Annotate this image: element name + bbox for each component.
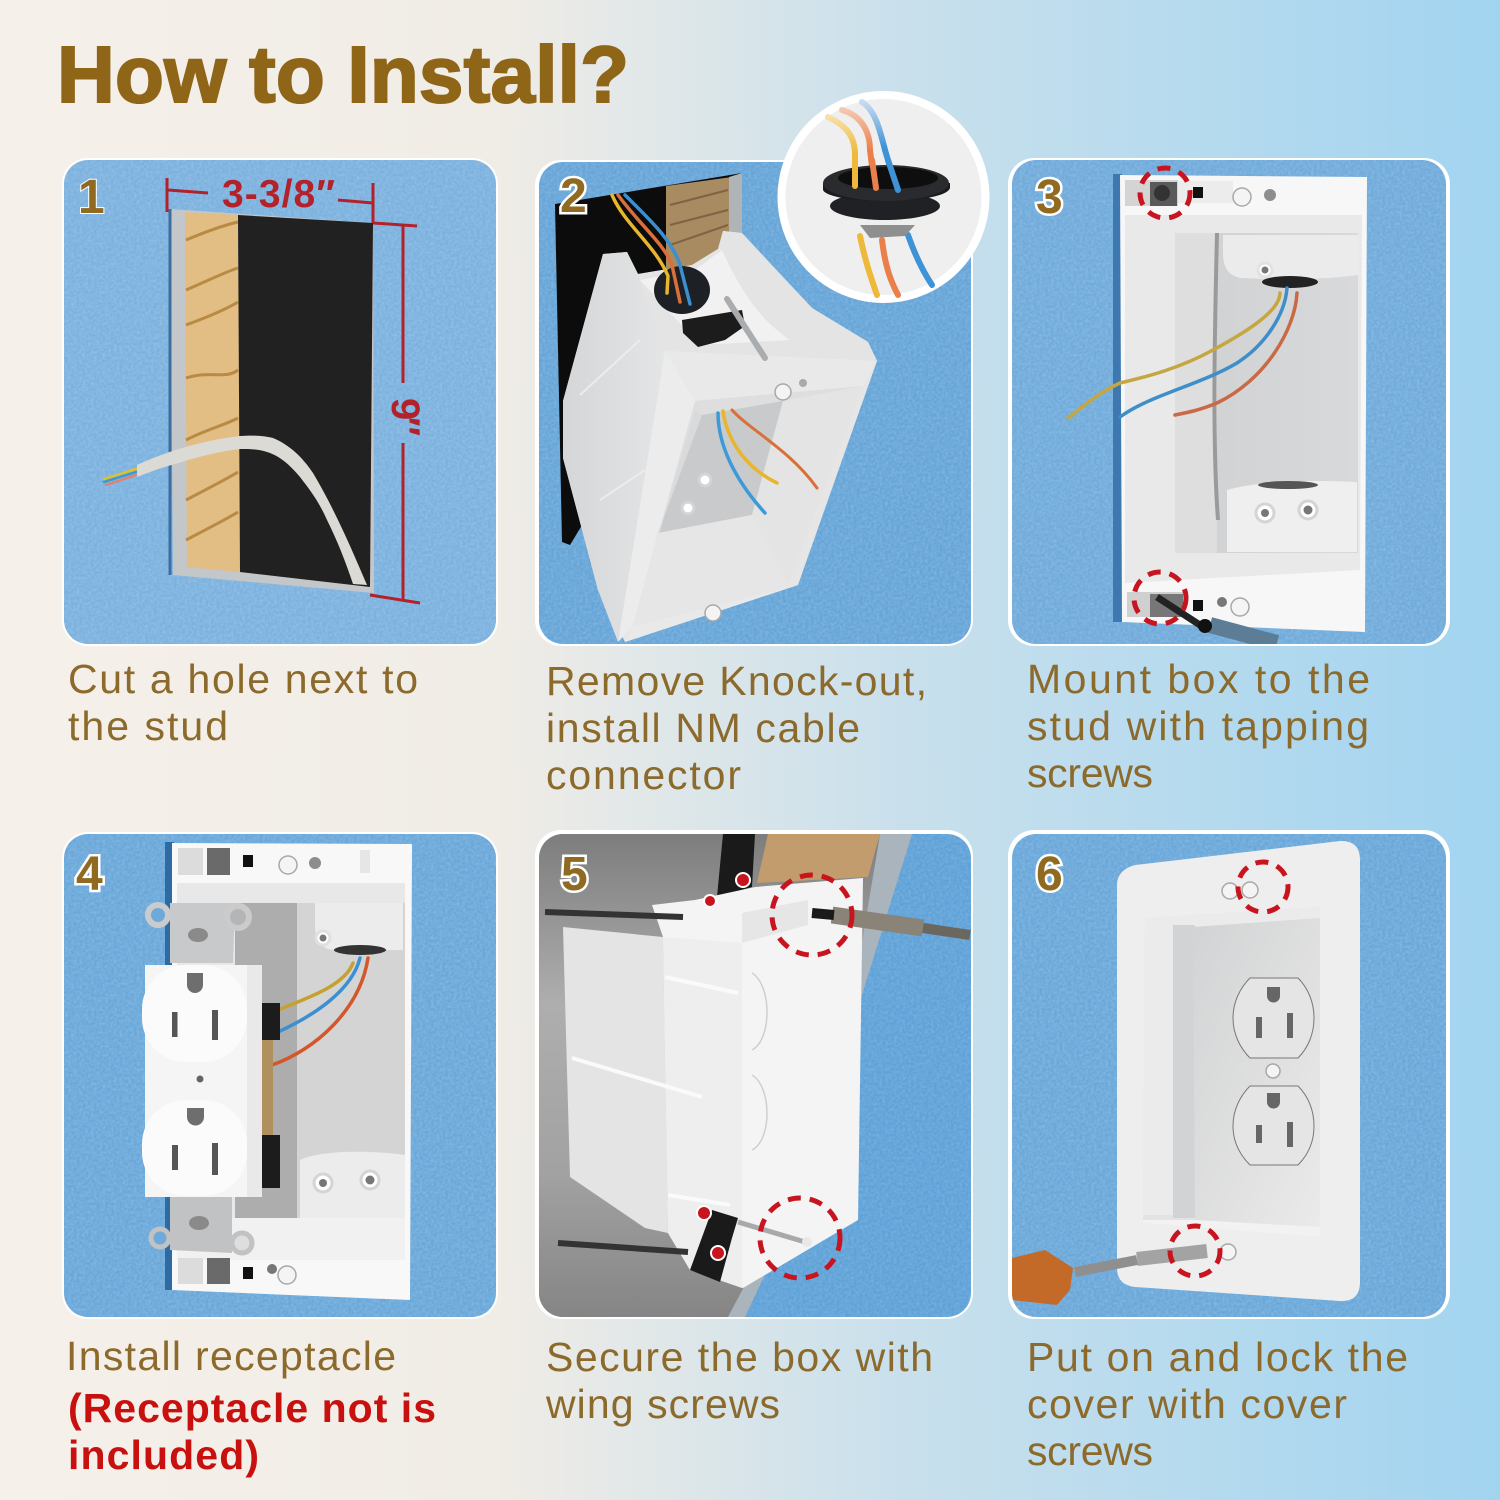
caption 6: screws bbox=[1027, 1428, 1153, 1474]
step number 6: 6 bbox=[1036, 848, 1063, 901]
caption 4: Install receptacle bbox=[66, 1333, 396, 1379]
panel: step 2 knock-out bbox=[535, 91, 990, 646]
screwdriver bbox=[812, 913, 970, 935]
wires top bbox=[612, 195, 690, 304]
panel: step 1 cut hole bbox=[62, 158, 498, 646]
caption 4: included) bbox=[68, 1432, 259, 1478]
panel: step 5 wing screws bbox=[535, 830, 973, 1319]
caption 2: install NM cable bbox=[546, 705, 860, 751]
step number 1: 1 bbox=[78, 171, 105, 224]
caption 4: (Receptacle not is bbox=[68, 1385, 436, 1431]
outlet faces bbox=[1233, 978, 1314, 1165]
panel: step 4 receptacle bbox=[62, 832, 498, 1319]
caption 6 bbox=[1027, 1334, 1408, 1474]
box bbox=[165, 842, 412, 1300]
caption 3 bbox=[1027, 656, 1370, 796]
caption 5: Secure the box with bbox=[546, 1334, 933, 1380]
caption 6: cover with cover bbox=[1027, 1381, 1347, 1427]
caption 1: Cut a hole next to bbox=[68, 656, 418, 702]
wires bbox=[272, 958, 368, 1065]
box bbox=[563, 878, 863, 1288]
callouts bbox=[1134, 168, 1190, 624]
caption 3: Mount box to the bbox=[1027, 656, 1370, 702]
screwdriver bbox=[1157, 597, 1277, 643]
caption 3: screws bbox=[1027, 750, 1153, 796]
dimension: width: 3-3/8″ bbox=[222, 173, 335, 216]
caption 5 bbox=[545, 1334, 933, 1427]
caption 1: the stud bbox=[68, 703, 228, 749]
callouts bbox=[760, 875, 852, 1278]
panel: step 3 mount box bbox=[1008, 158, 1450, 646]
wires bbox=[1068, 288, 1297, 418]
wires inside bbox=[718, 410, 817, 513]
panel: step 6 cover bbox=[1008, 830, 1450, 1319]
caption 4 bbox=[66, 1333, 436, 1478]
step number 3: 3 bbox=[1036, 171, 1063, 224]
caption 3: stud with tapping bbox=[1027, 703, 1369, 749]
hole with stud bbox=[170, 209, 374, 593]
dimension: height: 9″ bbox=[383, 398, 427, 436]
box bbox=[1113, 174, 1367, 632]
step number 2: 2 bbox=[560, 170, 587, 223]
red markers bbox=[697, 873, 750, 1260]
title: How to Install? bbox=[57, 30, 629, 119]
step number 5: 5 bbox=[561, 848, 588, 901]
caption 2: connector bbox=[546, 752, 741, 798]
step number 4: 4 bbox=[76, 848, 103, 901]
cover plate bbox=[1117, 841, 1360, 1301]
inset: connector bbox=[778, 91, 990, 303]
cable bbox=[104, 436, 367, 585]
receptacle bbox=[142, 903, 280, 1253]
dimension: width bbox=[167, 173, 373, 223]
caption 5: wing screws bbox=[545, 1381, 780, 1427]
dimension: height bbox=[370, 223, 427, 603]
caption 2: Remove Knock-out, bbox=[546, 658, 927, 704]
box body bbox=[563, 231, 877, 642]
screws bbox=[545, 912, 812, 1252]
caption 6: Put on and lock the bbox=[1027, 1334, 1408, 1380]
callouts bbox=[1170, 862, 1288, 1276]
caption 2 bbox=[546, 658, 927, 798]
caption 1 bbox=[68, 656, 418, 749]
screwdriver bbox=[1012, 1250, 1207, 1305]
wall opening bbox=[555, 173, 742, 545]
wall cavity bbox=[539, 834, 912, 1317]
